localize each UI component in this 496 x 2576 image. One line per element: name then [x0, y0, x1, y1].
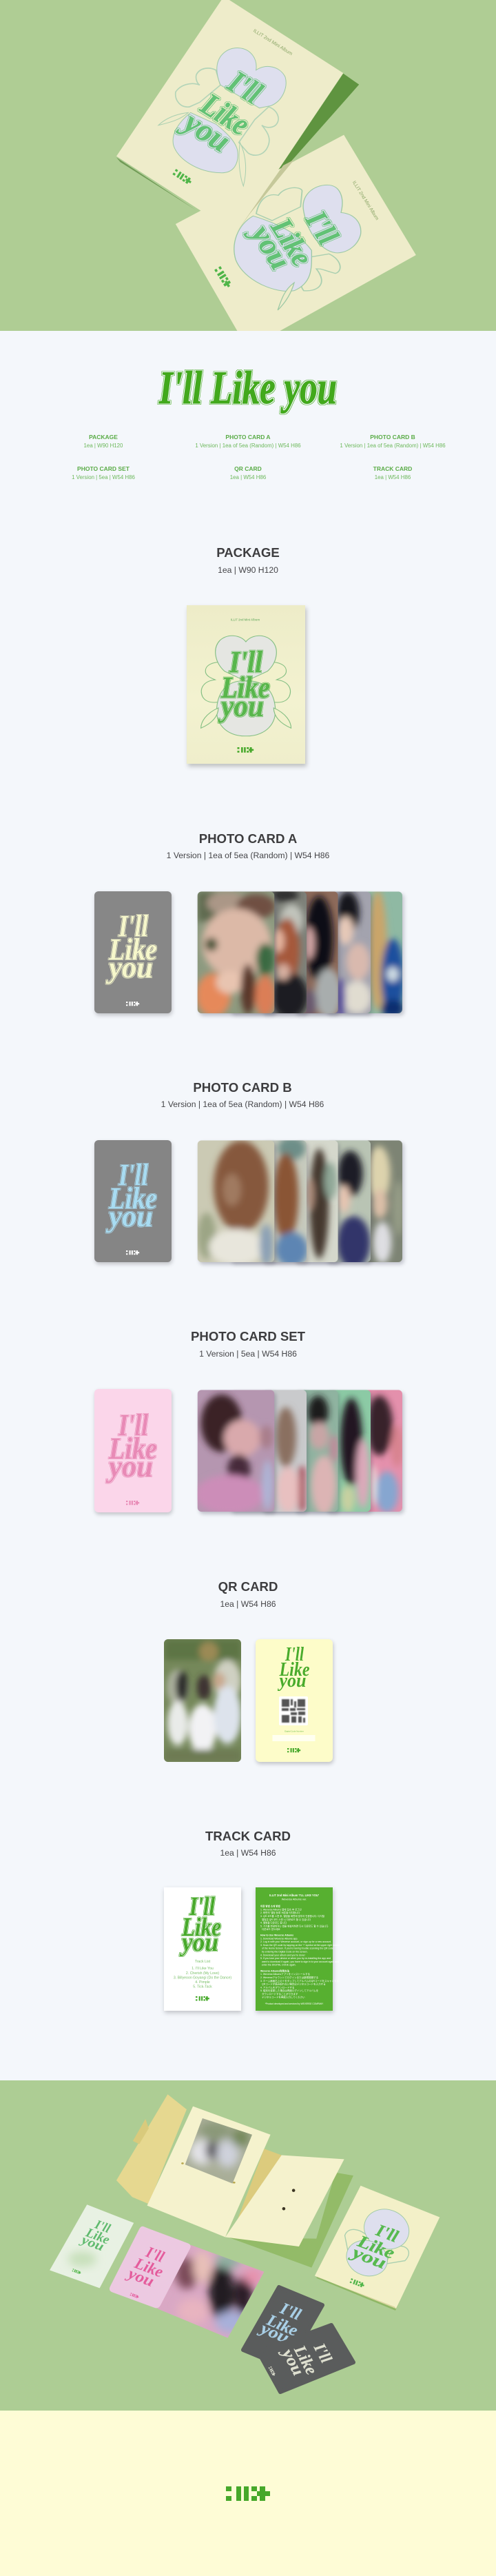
- index: photo card b: [340, 434, 446, 449]
- track card back with instructions: 1. Weverse Albums 앱에 접속 후 로그인: [260, 1908, 301, 1911]
- track card back with instructions: enter the DIGITAL CODE again.: [262, 1963, 296, 1966]
- track card back with instructions: ILLIT 2nd Mini Album 'I'LL LIKE YOU': [269, 1894, 318, 1897]
- track card back with instructions: 이용 방법 소개 방법: [260, 1904, 280, 1908]
- track card back with instructions: 2. 화면의 '앨범 등록' 버튼을 터치합니다: [260, 1911, 300, 1914]
- package logo: I'll: [229, 645, 263, 679]
- track card back with instructions: 3. Scan the QR code by tapping on the '+' symbol at the upper right corner: [260, 1944, 340, 1947]
- photo card b back: [94, 1140, 171, 1262]
- hero small album captions: [252, 28, 380, 221]
- qr card back: Digital Code Number: [285, 1730, 303, 1733]
- subheading: qr card: 1ea | W54 H86: [220, 1599, 276, 1609]
- heading: qr card: QR CARD: [218, 1579, 278, 1594]
- package logo: Like: [220, 671, 270, 704]
- hero small album captions: ILLIT 2nd Mini Album: [252, 28, 293, 57]
- track card back with instructions: 1. Weverse Albumsアプリをインストールする: [260, 1972, 310, 1976]
- card two: [229, 888, 309, 1019]
- track card back with instructions: 4. アルバムをダウンロードする: [260, 1985, 294, 1989]
- photo card set back: Like: [108, 1432, 157, 1466]
- card five: [325, 1390, 404, 1514]
- photo card b back: Like: [108, 1181, 157, 1215]
- clover illustration: [201, 636, 291, 736]
- heading: track card: TRACK CARD: [205, 1829, 291, 1843]
- photo card b back: I'll: [118, 1158, 148, 1192]
- photo card set back: I'll: [118, 1408, 148, 1442]
- photo card a fan of five blurred photos: [197, 891, 406, 1019]
- index: track card: [373, 465, 412, 480]
- pink card logo: I'll: [143, 2243, 167, 2266]
- index: photo card a: PHOTO CARD A: [225, 434, 271, 440]
- title logo: I'll Like you: [158, 361, 337, 414]
- track card back with instructions: Weverse Albums利用方法: [260, 1969, 289, 1973]
- opened package folder: [116, 2094, 353, 2268]
- pink card logo: Like: [132, 2254, 165, 2281]
- package caption: ILLIT 2nd Mini Album: [231, 618, 260, 622]
- track card back with instructions: ダウンロードすることができます: [262, 1992, 298, 1996]
- subheading: photo card set: 1 Version | 5ea | W54 H86: [199, 1349, 297, 1359]
- track card front: you: [179, 1928, 218, 1957]
- card three: [261, 1140, 340, 1264]
- photo card b back: you: [105, 1199, 152, 1233]
- card one: [195, 1390, 276, 1514]
- track card back with instructions: 3. ホーム画面右上の＋をタップしてアルバムのQRコードをスキャンする: [260, 1979, 338, 1982]
- qr card back: [255, 1639, 332, 1762]
- booklet logo: you: [347, 2242, 389, 2273]
- heading: package: PACKAGE: [216, 545, 280, 560]
- track card back with instructions: 앨범은 QR 코드 스캔 시 다운로드 할 수 있습니다: [262, 1918, 311, 1921]
- gray photo card b: [243, 2287, 322, 2368]
- photo card a back: [94, 891, 172, 1013]
- track list: 5. Tick-Tack: [193, 1985, 212, 1989]
- gray card a logo: I'll: [310, 2340, 335, 2366]
- photo card a back: I'll: [118, 909, 149, 943]
- track card back with instructions: QRコードが読み取れない場合はデジタルコードを入力する: [262, 1982, 325, 1985]
- hero logo: upper book: I'll: [222, 63, 269, 111]
- card two: [229, 1390, 309, 1514]
- track card back with instructions: 5. 기기를 변경하거나 앱을 재설치하면 다시 다운로드 할 수 있습니다: [260, 1925, 329, 1927]
- heading: photo card b: PHOTO CARD B: [193, 1080, 292, 1095]
- qr card front photo: [164, 1639, 241, 1762]
- track card back with instructions: 다운로드 받으세요: [262, 1927, 280, 1931]
- track list: 2. Cherish (My Love): [186, 1971, 219, 1976]
- track card back with instructions: 5. 端末を変更した場合は再度ログインしてアルバムを: [260, 1989, 318, 1992]
- index: package: 1ea | W90 H120: [84, 443, 123, 449]
- index: qr card: 1ea | W54 H86: [230, 474, 266, 480]
- track card back with instructions: 2. Weverseアカウントでログインまたは新規登録する: [260, 1976, 318, 1979]
- card two: [229, 1137, 309, 1267]
- card three: [261, 1390, 340, 1515]
- pink card logo: [124, 2243, 167, 2290]
- lower book and shadow shapes: [116, 0, 416, 331]
- track card back with instructions: 4. Download your album and you're done!: [260, 1954, 304, 1956]
- track list: 4. Pimple: [195, 1980, 210, 1985]
- pink card logo: you: [124, 2264, 156, 2290]
- index: track card: 1ea | W54 H86: [375, 474, 411, 480]
- track list: Track List: [195, 1960, 211, 1964]
- hero brand marks: [172, 169, 232, 289]
- track list: 1. I'll Like You: [192, 1967, 214, 1971]
- brand mark: [237, 747, 254, 753]
- heading: photo card set: PHOTO CARD SET: [191, 1329, 305, 1343]
- index: package: [84, 434, 123, 449]
- bottom photo: opened package and contents on green: [0, 2080, 496, 2411]
- card one: [196, 891, 276, 1017]
- index: qr card: QR CARD: [234, 465, 262, 472]
- track card back with instructions: want to download it again, you have to sign in to your account again and: [262, 1960, 338, 1963]
- track card back with instructions: デジタルコードを再度入力してください: [262, 1995, 305, 1999]
- package logo: you: [218, 689, 264, 723]
- heading: photo card a: PHOTO CARD A: [199, 831, 297, 846]
- track card back with instructions: 3. QR 코드를 스캔 후, 앨범을 화면에 맞추어 인증합니다. 디지털: [260, 1914, 324, 1918]
- gray card a logo: Like: [290, 2342, 320, 2378]
- qr card back: Like: [278, 1659, 309, 1681]
- photo card set fan of five blurred photos: [197, 1389, 406, 1517]
- track card logo: Like: [83, 2225, 112, 2248]
- track card front: Like: [181, 1913, 221, 1942]
- index: photo card set: 1 Version | 5ea | W54 H86: [72, 474, 135, 480]
- photo card set back: you: [105, 1450, 152, 1483]
- card three: [261, 891, 342, 1019]
- qr card back: you: [277, 1670, 306, 1692]
- hero small album captions: ILLIT 2nd Mini Album: [351, 181, 380, 221]
- booklet logo: [347, 2221, 401, 2273]
- track card back with instructions: of the Home Screen. If you're having trouble scanning the QR code,: [262, 1947, 333, 1949]
- track card back with instructions: [255, 1887, 332, 2011]
- track card back with instructions: How to Use Weverse Albums: [260, 1934, 293, 1937]
- footer band with brand mark: [0, 2411, 496, 2576]
- index: track card: TRACK CARD: [373, 465, 412, 472]
- card five: [325, 891, 404, 1018]
- subheading: track card: 1ea | W54 H86: [220, 1848, 276, 1858]
- card four: [293, 891, 373, 1018]
- subheading: photo card a: 1 Version | 1ea of 5ea (Random) | W54 H86: [167, 851, 329, 860]
- track card back with instructions: 4. 앨범을 다운로드 합니다: [260, 1920, 287, 1925]
- index: photo card set: [72, 465, 135, 480]
- closed booklet: [315, 2186, 440, 2311]
- gray card b logo: [256, 2300, 304, 2347]
- qr card back: I'll: [285, 1644, 304, 1665]
- photo card a back: Like: [108, 933, 157, 966]
- track list: 3. Billyeoon Goyangi (Do the Dance): [174, 1976, 231, 1980]
- index: photo card b: 1 Version | 1ea of 5ea (Random) | W54 H86: [340, 443, 446, 449]
- track card front: I'll: [189, 1892, 215, 1921]
- booklet logo: I'll: [373, 2221, 401, 2247]
- photo card set back: [94, 1389, 171, 1512]
- photo card b fan of five blurred photos: [197, 1139, 406, 1268]
- upper book clover: [158, 48, 286, 186]
- track list: [174, 1960, 231, 1989]
- photo card a back: you: [105, 951, 153, 984]
- index: photo card a: 1 Version | 1ea of 5ea (Random) | W54 H86: [195, 443, 301, 449]
- gray card b logo: Like: [263, 2311, 300, 2340]
- hero logo: lower book: I'll: [299, 205, 345, 251]
- package front: [187, 605, 305, 764]
- index: package: PACKAGE: [89, 434, 118, 440]
- hero logo: lower book: [243, 205, 345, 276]
- gray card b logo: you: [256, 2319, 291, 2347]
- hero logo: upper book: you: [175, 102, 236, 159]
- track card back with instructions: 1. Download Weverse Albums app.: [260, 1937, 298, 1940]
- gray card b logo: I'll: [277, 2300, 304, 2324]
- booklet logo: Like: [354, 2232, 397, 2263]
- index: qr card: [230, 465, 266, 480]
- photo card set spread: [110, 2227, 266, 2340]
- hero logo: lower book: you: [243, 216, 298, 276]
- index: photo card a: [195, 434, 301, 449]
- qr code: [278, 1696, 307, 1725]
- gray card a logo: [277, 2340, 335, 2379]
- track card logo: [78, 2217, 112, 2254]
- track card front: [164, 1887, 241, 2011]
- gray card a logo: you: [277, 2344, 307, 2379]
- index: photo card b: PHOTO CARD B: [370, 434, 415, 440]
- card four: [293, 1390, 373, 1514]
- index: photo card set: PHOTO CARD SET: [77, 465, 130, 472]
- subheading: photo card b: 1 Version | 1ea of 5ea (Random) | W54 H86: [161, 1099, 324, 1109]
- track card logo: you: [78, 2232, 106, 2254]
- track card back with instructions: *Product developed and serviced by WEVERSE COMPANY: [265, 2002, 324, 2005]
- track card on table: [50, 2204, 134, 2288]
- gray photo card a: [258, 2325, 353, 2392]
- track card back with instructions: try entering the Digital Code on the screen.: [262, 1951, 307, 1954]
- subheading: package: 1ea | W90 H120: [218, 565, 278, 575]
- track card back with instructions: 5. If you lose your device or when you try re-installing the app and: [260, 1957, 330, 1960]
- hero logo: lower book: Like: [264, 212, 319, 272]
- card one: [198, 1140, 276, 1266]
- track card back with instructions: 2. Log in with your Weverse account, or sign up for a new account.: [260, 1940, 331, 1943]
- hero logo: upper book: [175, 63, 269, 159]
- hero logo: upper book: Like: [194, 85, 256, 142]
- track card logo: I'll: [92, 2217, 112, 2236]
- package logo: [218, 645, 270, 723]
- card five: [325, 1140, 404, 1264]
- card four: [293, 1140, 373, 1269]
- track card back with instructions: Weverse Albums ver.: [281, 1897, 307, 1901]
- hero photo: two album packages on green: [0, 0, 496, 331]
